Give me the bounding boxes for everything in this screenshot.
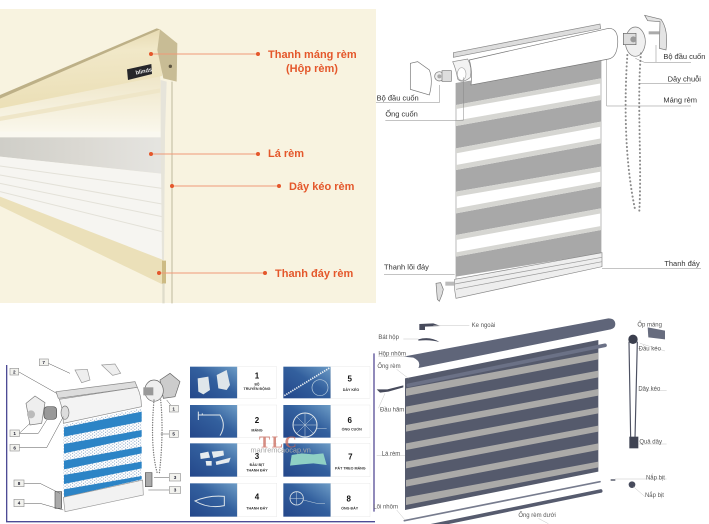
fabric with stripes	[456, 60, 601, 280]
card 6: 6	[347, 416, 352, 425]
labels: Máng rèm	[663, 96, 697, 105]
labels: Bộ đầu cuốn	[377, 94, 419, 103]
leader lines	[377, 326, 667, 524]
card 1: BỘ	[254, 381, 260, 386]
fabric	[63, 408, 142, 497]
labels	[377, 52, 705, 272]
card 2: 2	[255, 416, 260, 425]
callout: Lá rèm: Lá rèm	[268, 148, 304, 160]
card 1: 1	[255, 371, 260, 380]
labels: Quả dây	[639, 439, 662, 445]
number tags: 6	[13, 445, 16, 450]
panel: line drawing of blind parts	[376, 15, 705, 301]
panel: photo of blind with labels	[0, 9, 376, 303]
photo: zebra blind: blinds	[135, 67, 153, 77]
callout: Thanh máng rèm: (Hộp rèm)	[286, 63, 338, 75]
labels: Lõi nhôm	[373, 505, 398, 511]
card 4: 4	[255, 492, 260, 501]
card 7: PÁT TREO MÁNG	[335, 465, 366, 470]
card 2: MÁNG	[251, 427, 263, 432]
panel: exploded grey blind diagram	[373, 318, 667, 524]
panel: exploded blue blind diagram	[7, 359, 375, 522]
labels: Đầu hãm	[380, 408, 404, 414]
card 3: THANH ĐÁY	[246, 467, 268, 472]
card 8	[283, 483, 370, 517]
card 8: ỐNG ĐÁY	[341, 506, 359, 511]
card 5: DÂY KÉO	[343, 387, 359, 392]
frame edge	[372, 353, 376, 512]
bead chain	[626, 53, 641, 211]
left end parts	[410, 62, 451, 95]
labels: Nắp bịt	[646, 474, 665, 481]
callout: Thanh đáy rèm: Thanh đáy rèm	[275, 268, 353, 280]
bottom rails	[404, 482, 601, 524]
number tags	[10, 359, 181, 507]
card 3: ĐẦU BỊT	[250, 463, 265, 467]
card 7: 7	[348, 453, 353, 462]
card 7	[283, 443, 370, 477]
card 4: THANH ĐÁY	[246, 505, 268, 510]
roller tube	[408, 345, 605, 385]
labels: Bộ đầu cuốn	[663, 52, 705, 61]
number tags: 1	[13, 431, 16, 436]
labels: Thanh đáy	[664, 259, 700, 268]
labels: Dây kéo	[638, 386, 661, 392]
leader lines	[18, 363, 173, 510]
number tags: 3	[174, 488, 177, 493]
number tags: 4	[18, 501, 21, 506]
card 4	[190, 483, 277, 517]
callout: Lá rèm	[149, 148, 304, 160]
number tags: 7	[42, 360, 45, 365]
callout: Thanh máng rèm	[149, 49, 357, 75]
card 6	[283, 405, 370, 438]
leader lines	[376, 45, 701, 274]
number tags: 5	[172, 432, 175, 437]
labels: Ốp máng	[637, 321, 662, 328]
small parts	[377, 323, 635, 488]
number tags: 3	[174, 475, 177, 480]
card 5: 5	[347, 375, 352, 384]
labels: Dây chuỗi	[668, 74, 701, 83]
fabric	[405, 340, 598, 510]
watermark: TLC	[259, 432, 298, 451]
frame	[7, 365, 375, 522]
card 3: 3	[255, 452, 260, 461]
card 2	[190, 405, 277, 438]
number tags: 2	[13, 369, 16, 374]
labels: Ống cuốn	[385, 109, 418, 119]
labels: Nắp bịt	[645, 492, 664, 499]
labels: Thanh lõi đáy	[384, 263, 429, 272]
number tags: 1	[172, 406, 175, 411]
callout: Dây kéo rèm	[170, 181, 355, 193]
labels: Lá rèm	[382, 452, 400, 458]
labels: Ke ngoài	[472, 323, 495, 329]
labels: Đầu kéo	[639, 346, 662, 352]
photo: zebra blind	[0, 28, 177, 303]
watermark: manremcaocap.vn	[251, 446, 311, 455]
pull mechanism	[628, 327, 665, 448]
card 8: 8	[346, 495, 351, 504]
watermark	[251, 432, 311, 455]
card 1	[190, 367, 277, 398]
bottom rail	[55, 473, 152, 512]
head rail roller	[453, 24, 618, 85]
card 1: TRUYỀN ĐỘNG	[243, 386, 271, 391]
labels: Ống rèm dưới	[518, 512, 556, 519]
labels: Ống rèm	[377, 363, 401, 370]
card 3	[190, 443, 277, 477]
panel: numbered parts legend	[190, 367, 370, 517]
callout: Thanh máng rèm: Thanh máng rèm	[268, 49, 357, 61]
bottom rail	[436, 253, 602, 301]
cassette	[56, 382, 141, 423]
callout: Dây kéo rèm: Dây kéo rèm	[289, 181, 355, 193]
labels: Hộp nhôm	[378, 351, 406, 357]
labels	[373, 321, 665, 519]
card 6: ỐNG CUỐN	[342, 427, 362, 432]
right bracket and clutch	[623, 15, 667, 56]
number tags: 8	[18, 481, 21, 486]
labels: Bát hộp	[378, 335, 400, 341]
card 5	[283, 367, 370, 398]
callout: Thanh đáy rèm	[157, 268, 353, 280]
brackets	[26, 364, 180, 425]
chain	[153, 400, 162, 473]
aluminium head box	[403, 318, 615, 368]
